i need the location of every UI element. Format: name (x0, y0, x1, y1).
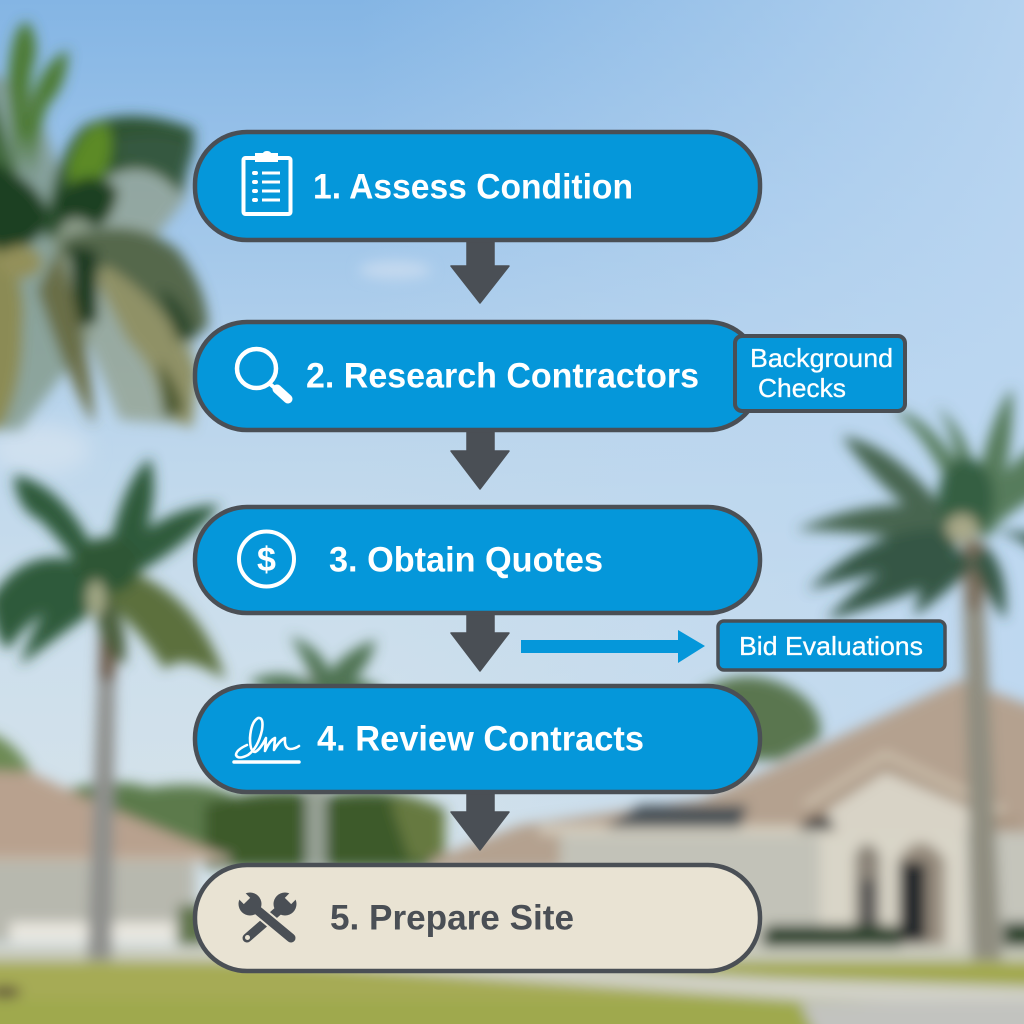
label: 5. Prepare Site: 5. Prepare Site (330, 898, 574, 938)
callout: Bid Evaluations (718, 621, 945, 670)
connector arrow: step 4 to 5 (451, 790, 509, 850)
icon: clipboard checklist (244, 151, 290, 214)
connector arrow: step 2 to 3 (451, 428, 509, 489)
tree mass (205, 792, 445, 868)
step 1: Assess Condition (195, 132, 760, 240)
left house (0, 770, 230, 862)
icon: magnifying glass (237, 349, 288, 399)
step 4: Review Contracts (195, 686, 760, 792)
connector arrow: step 1 to 2 (451, 238, 509, 303)
step 2: Research Contractors (195, 322, 760, 430)
step 3: Obtain Quotes (195, 507, 760, 613)
side arrow to Bid Evaluations (521, 630, 705, 663)
right house (430, 680, 1024, 870)
distant palm (308, 670, 326, 870)
step 5: Prepare Site (195, 865, 760, 971)
lawn and paths (0, 947, 1024, 963)
icon: signature (234, 718, 299, 762)
connector arrow: step 3 to 4 (451, 611, 509, 671)
label: 2. Research Contractors: 2. Research Contractors (306, 356, 699, 396)
icon: dollar coin (239, 532, 294, 586)
palm: large left (0, 60, 100, 430)
icon: dollar coin: $ (257, 541, 276, 579)
palm: right (962, 545, 1002, 960)
callout: Background Checks: Checks (758, 373, 846, 403)
callout: Background Checks: Background (750, 343, 893, 373)
callout: Background Checks (735, 336, 905, 411)
label: 4. Review Contracts: 4. Review Contracts (317, 720, 644, 758)
callout: Bid Evaluations: Bid Evaluations (739, 631, 923, 661)
label: 1. Assess Condition: 1. Assess Condition (313, 168, 633, 206)
far trees (60, 782, 240, 860)
icon: crossed wrench and screwdriver (236, 890, 299, 940)
palm: left foreground (87, 620, 116, 960)
label: 3. Obtain Quotes: 3. Obtain Quotes (329, 540, 603, 580)
